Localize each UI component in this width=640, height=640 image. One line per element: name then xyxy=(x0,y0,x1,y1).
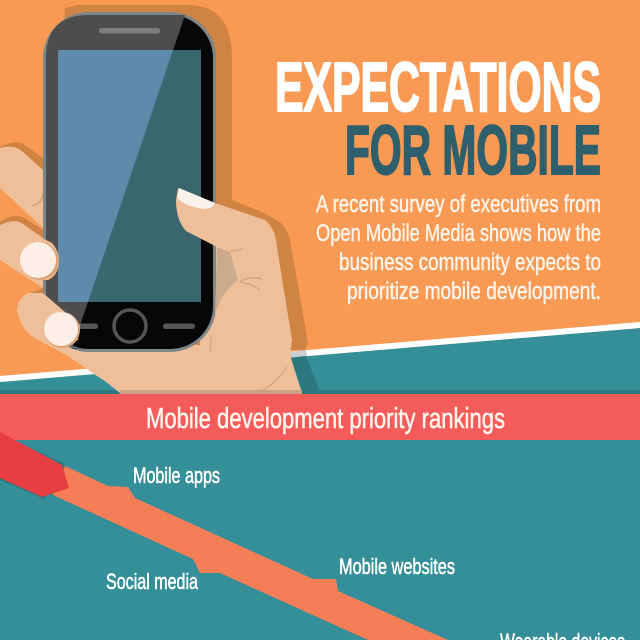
lower teal panel xyxy=(0,440,640,640)
crease on top finger xyxy=(32,193,43,206)
middle finger nail xyxy=(20,242,59,280)
middle finger base xyxy=(0,221,43,288)
soft keys xyxy=(78,324,195,329)
ribbon start marker xyxy=(0,432,69,499)
banner xyxy=(0,394,640,440)
label: mobile apps: Mobile apps xyxy=(133,463,220,488)
web shade xyxy=(215,247,238,313)
palm xyxy=(60,230,302,393)
skin creases xyxy=(210,248,287,393)
ranking ribbon xyxy=(53,465,448,640)
palm over phone edge xyxy=(210,280,290,352)
teal wedge with white edge xyxy=(0,322,640,394)
finger shadows xyxy=(0,142,43,298)
home button xyxy=(114,310,146,342)
hand and phone shadow xyxy=(60,5,308,350)
speaker xyxy=(99,28,160,34)
phone body xyxy=(43,12,216,352)
thumb xyxy=(176,188,286,310)
middle fingertip xyxy=(40,237,59,280)
label: social media: Social media xyxy=(106,569,199,594)
screen xyxy=(58,50,201,302)
label: mobile websites: Mobile websites xyxy=(339,554,455,579)
bottom finger xyxy=(17,293,120,391)
bottom finger nail xyxy=(44,312,80,348)
top finger xyxy=(0,147,43,228)
intro text xyxy=(316,191,601,305)
wrist shade xyxy=(120,390,302,394)
thumb nail xyxy=(177,188,215,209)
banner heading: Mobile development priority rankings xyxy=(146,403,505,435)
title xyxy=(275,48,601,189)
phone left glare xyxy=(46,15,185,349)
orange header background xyxy=(0,0,640,394)
hand front xyxy=(17,188,302,394)
phone xyxy=(43,12,216,352)
shadow across white line and teal xyxy=(288,350,320,394)
